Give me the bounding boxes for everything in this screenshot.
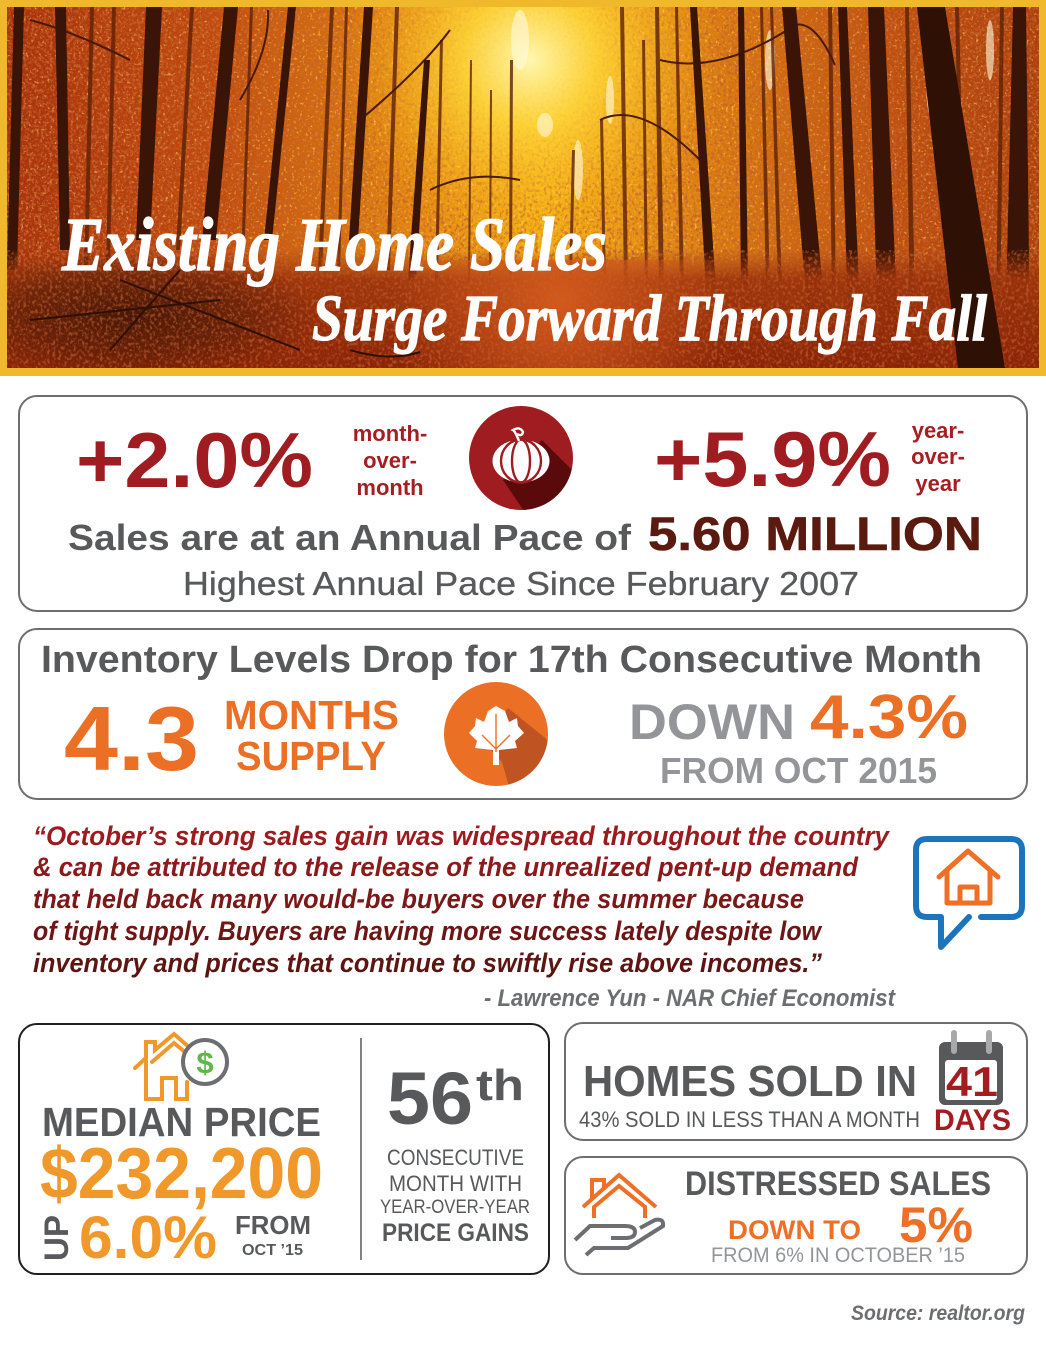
label: month-over-month: month xyxy=(356,475,424,500)
heading: inventory: Inventory Levels Drop for 17th Consecutive Month xyxy=(41,639,982,681)
foreground large trunk xyxy=(917,7,1005,368)
label: from: FROM xyxy=(235,1210,311,1240)
text: consecutive month gains xyxy=(380,1145,530,1247)
panel: inventory levels xyxy=(19,629,1027,800)
label: days: DAYS xyxy=(934,1104,1011,1137)
stat: 4.3 percent: 4.3% xyxy=(810,683,968,752)
source note: Source: realtor.org xyxy=(851,1302,1025,1325)
panel: homes sold in 41 days xyxy=(565,1023,1027,1140)
stat: 56th: th xyxy=(476,1061,524,1110)
label: month-over-month: over- xyxy=(363,448,417,473)
label: year-over-year: year xyxy=(915,471,961,496)
calendar number: 41 xyxy=(946,1058,998,1105)
stat: month-over-month: +2.0% xyxy=(76,416,313,504)
label: supply: SUPPLY xyxy=(236,733,386,779)
panel: distressed sales xyxy=(565,1157,1027,1274)
quote block: of tight supply. Buyers are having more success lately despite low xyxy=(33,916,823,946)
text: consecutive month gains: MONTH WITH xyxy=(389,1171,522,1196)
label: up (rotated): UP xyxy=(38,1215,76,1261)
text: consecutive month gains: PRICE GAINS xyxy=(382,1219,529,1247)
header banner: autumn forest photo with title xyxy=(0,0,1046,380)
quote block: “October’s strong sales gain was widespread throughout the country xyxy=(33,821,891,851)
stat: 5.60 million: 5.60 MILLION xyxy=(648,507,982,560)
icon: hand holding house xyxy=(575,1175,663,1255)
subhead: highest pace: Highest Annual Pace Since February 2007 xyxy=(183,565,859,602)
gold border frame xyxy=(0,0,1046,376)
stat: down: DOWN xyxy=(629,694,795,750)
bush shadow at lower left xyxy=(7,254,305,368)
text: consecutive month gains: YEAR-OVER-YEAR xyxy=(380,1197,530,1218)
label: down to: DOWN TO xyxy=(728,1215,861,1245)
stat: 4.3 months: 4.3 xyxy=(64,689,199,790)
title line 1: Existing Home Sales xyxy=(61,203,607,287)
text: consecutive month gains: CONSECUTIVE xyxy=(387,1145,524,1170)
panel: annual sales pace xyxy=(19,396,1027,611)
stat: 6.0 percent: 6.0% xyxy=(79,1204,217,1271)
icon: house with dollar coin xyxy=(135,1034,227,1099)
quote block: that held back many would-be buyers over the summer because xyxy=(33,884,804,914)
label: year-over-year: over- xyxy=(911,444,965,469)
branches xyxy=(30,10,835,190)
subtext: from 6 percent: FROM 6% IN OCTOBER ’15 xyxy=(711,1244,965,1267)
quote attribution: - Lawrence Yun - NAR Chief Economist xyxy=(484,985,896,1012)
stat: year-over-year: +5.9% xyxy=(654,415,891,503)
quote block: inventory and prices that continue to swiftly rise above incomes.” xyxy=(33,948,822,978)
subtext: 43 percent: 43% SOLD IN LESS THAN A MONTH xyxy=(579,1107,920,1132)
label: months: MONTHS xyxy=(224,692,399,738)
label: month-over-month xyxy=(353,421,427,500)
stat: 5 percent: 5% xyxy=(899,1197,973,1253)
label: month-over-month: month- xyxy=(353,421,427,446)
label: from oct 2015: FROM OCT 2015 xyxy=(660,750,937,791)
thin background trunks xyxy=(84,7,1004,278)
forest floor xyxy=(7,250,1039,368)
dollar sign: $ xyxy=(196,1045,214,1080)
fallen branches xyxy=(30,270,420,357)
main dark trunks xyxy=(7,7,1030,285)
sky gaps xyxy=(511,10,994,200)
label: median price: MEDIAN PRICE xyxy=(42,1099,321,1145)
forest photo xyxy=(0,7,1039,380)
label: oct 15: OCT ’15 xyxy=(242,1242,303,1259)
label: year-over-year: year- xyxy=(912,418,964,443)
heading: homes sold: HOMES SOLD IN xyxy=(583,1057,917,1106)
label: year-over-year xyxy=(911,418,965,496)
quote block xyxy=(33,821,891,978)
heading: distressed sales: DISTRESSED SALES xyxy=(685,1165,991,1203)
icon: speech bubble with house xyxy=(916,839,1022,947)
icon: calendar xyxy=(939,1033,1003,1105)
quote block: & can be attributed to the release of the unrealized pent-up demand xyxy=(33,852,858,882)
annual pace sentence: Sales are at an Annual Pace of xyxy=(68,517,632,558)
stat: price: $232,200 xyxy=(40,1134,323,1214)
stat: 56th: 56 xyxy=(387,1057,473,1140)
icon: pumpkin xyxy=(469,406,573,510)
panel: median price xyxy=(19,1024,549,1274)
stat: 56th xyxy=(387,1057,524,1140)
icon: maple leaf xyxy=(444,682,548,786)
